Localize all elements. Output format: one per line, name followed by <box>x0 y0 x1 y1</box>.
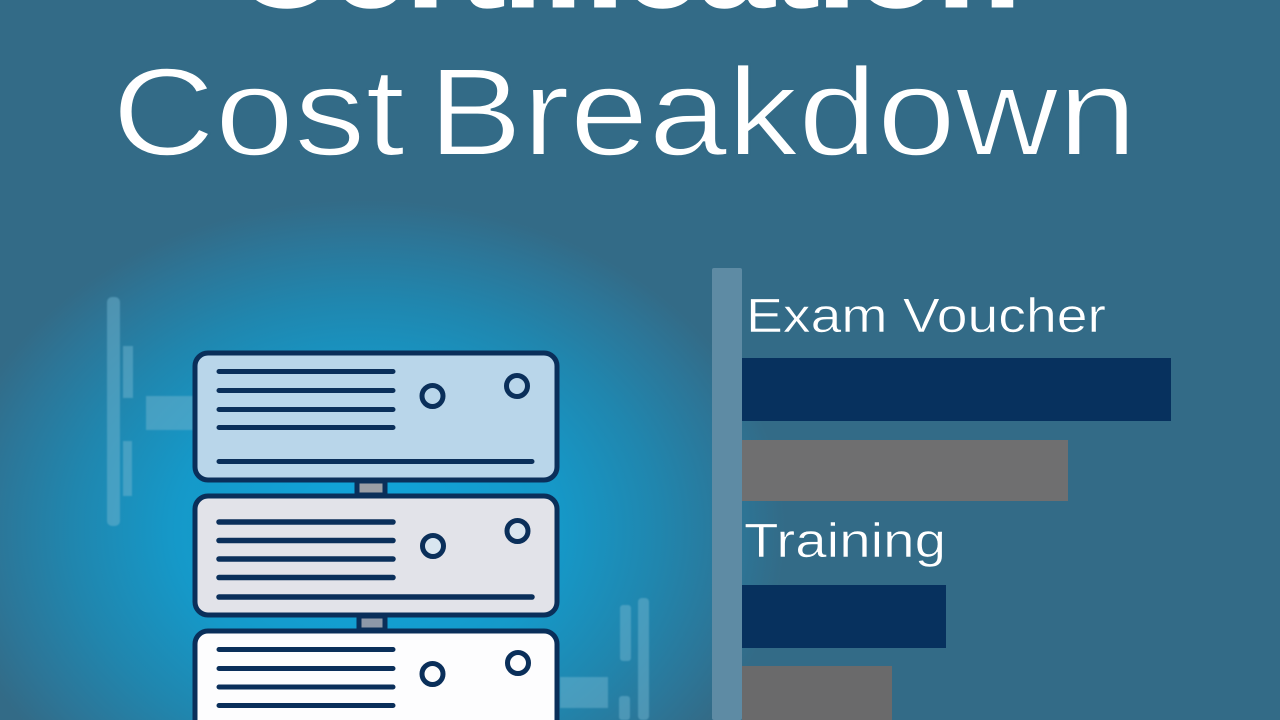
server stack icon <box>195 353 557 720</box>
decorative motion marks, right <box>560 598 649 720</box>
title word: Breakdown: Breakdown <box>428 43 1137 182</box>
bar: training navy <box>742 585 946 648</box>
connector lower <box>359 616 385 630</box>
decorative motion marks, left <box>107 297 193 526</box>
label: Exam Voucher: Exam Voucher <box>746 290 1106 343</box>
title word: Cost: Cost <box>112 43 405 182</box>
chart axis <box>712 268 742 720</box>
title <box>112 0 1137 182</box>
background glow <box>0 190 800 720</box>
server unit 3 <box>195 631 557 720</box>
connector upper <box>357 481 385 495</box>
bar chart <box>712 268 1171 720</box>
bar: training gray <box>742 666 892 720</box>
bar: exam voucher gray <box>742 440 1068 501</box>
server unit 1 <box>195 353 557 480</box>
server unit 2 <box>195 496 557 615</box>
bar: exam voucher navy <box>742 358 1171 421</box>
label: Training: Training <box>744 515 946 568</box>
